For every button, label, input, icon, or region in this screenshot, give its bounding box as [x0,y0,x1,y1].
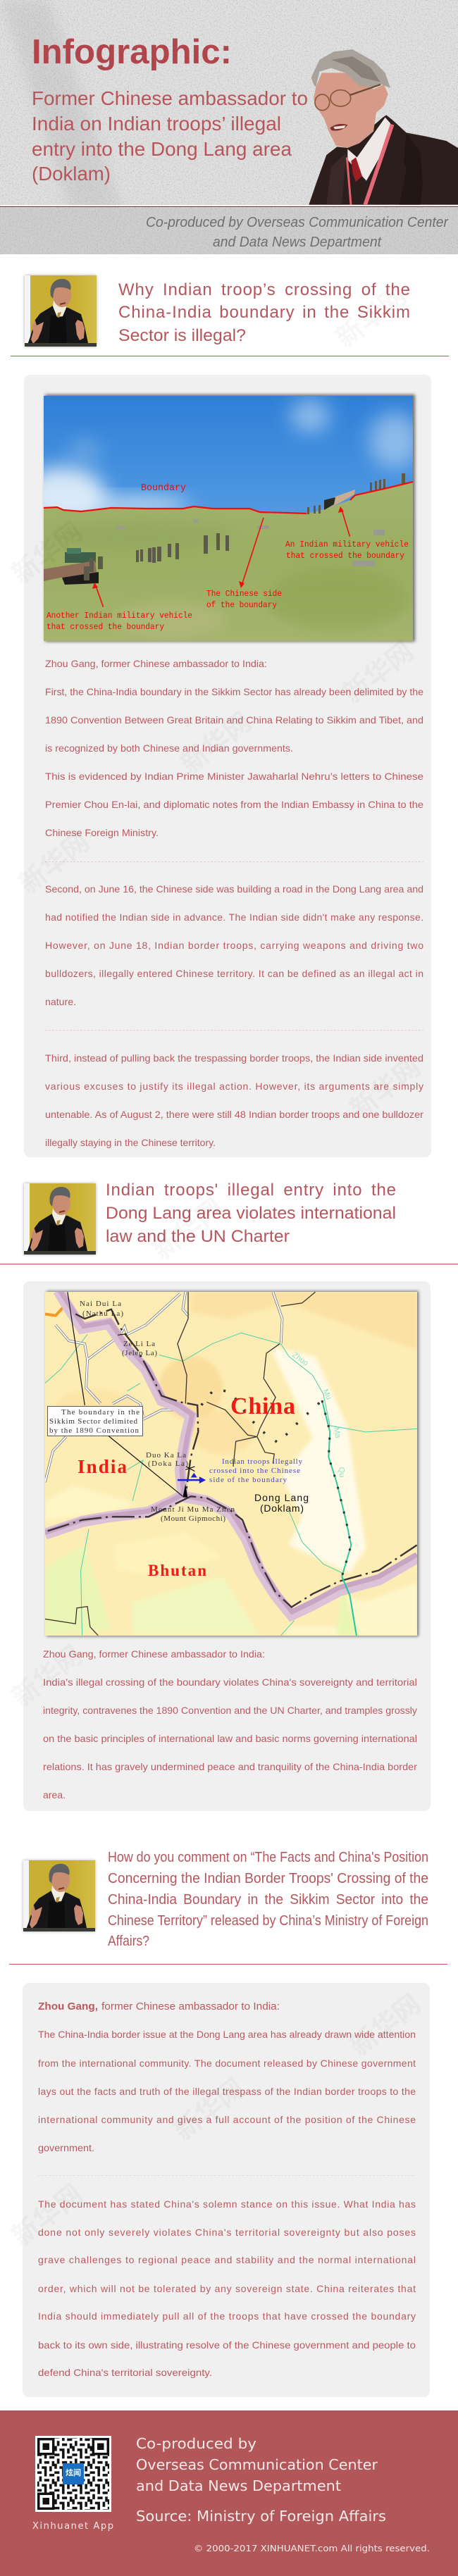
panel 1 text: Zhou Gang, former Chinese ambassador to India: [45,658,267,669]
byline: and Data News Department [213,235,382,250]
map place labels [78,1300,346,1579]
map callout box: Sikkim Sector delimited [49,1417,138,1426]
panel 1 text: 1890 Convention Between Great Britain and China Relating to Sikkim and Tibet, and [45,714,423,726]
question text: China-India boundary in the Sikkim [118,303,410,322]
map place labels: Duo Ka La [146,1451,186,1460]
leader lines [68,1292,194,1496]
map place labels: Qu [337,1467,346,1478]
panel 2 text: area. [43,1789,66,1800]
panel 3 text [38,2001,416,2378]
panel 3 text: from the international community. The document released by Chinese government [38,2058,416,2069]
panel 1 text: illegally staying in the Chinese territory. [45,1137,216,1148]
subtitle: Former Chinese ambassador to [32,87,308,109]
panel 3 text: back to its own side, illustrating resolve of the Chinese government and people to [38,2339,416,2351]
question text: Concerning the Indian Border Troops' Crossing of the [108,1871,428,1886]
question text: Sector is illegal? [118,326,246,345]
map place labels: Zhuo [290,1351,310,1368]
map place labels: Bhutan [148,1562,206,1579]
panel 1 text: nature. [45,996,76,1007]
panel 3 text: grave challenges to regional peace and stability and the normal international [38,2254,416,2265]
panel 3 text: former Chinese ambassador to India: [101,2001,280,2012]
section 2 title text [106,1181,396,1246]
section 3 heading [23,1850,428,1949]
credits: and Data News Department [136,2477,341,2494]
map of the Dong Lang area [45,1290,419,1636]
panel 1 text: bulldozers, illegally entered Chinese territory. It can be defined as an illegal act in [45,968,423,979]
photo annotations: The Chinese side [206,589,282,599]
map callout box: The boundary in the [61,1408,140,1417]
panel 2 [23,1281,431,1811]
panel 2 text: Zhou Gang, former Chinese ambassador to India: [43,1648,265,1660]
title: Infographic: [32,33,232,71]
watermarks: 新华网 [169,2074,250,2146]
panel 2 text: integrity, contravenes the 1890 Convention and the UN Charter, and tramples grossly [43,1705,417,1716]
byline [146,215,449,250]
watermarks: 新华网 [14,827,95,900]
photo annotations: Boundary [141,483,186,494]
panel 3 text: defend China's territorial sovereignty. [38,2367,212,2378]
panel 2 text: on the basic principles of international law and basic norms governing international [43,1733,417,1744]
map place labels: (Jelep La) [122,1349,157,1357]
icon: portrait thumbnail [24,1183,96,1255]
question text: Why Indian troop’s crossing of the [118,280,410,299]
subtitle: entry into the Dong Lang area [32,138,292,160]
panel 1 text: Third, instead of pulling back the trespassing border troops, the Indian side invented [45,1052,423,1064]
map place labels: Mu [321,1388,333,1401]
map place labels: China [230,1393,295,1419]
copyright: © 2000-2017 XINHUANET.com All rights reserved. [194,2544,430,2553]
panel 1 text: had notified the Indian side in advance. The Indian side didn't make any response. [45,911,423,923]
section 1 heading [25,275,410,347]
question text: China-India Boundary in the Sikkim Sector into the [108,1892,428,1908]
header banner [0,0,458,254]
watermarks: 新华网 [148,1193,229,1266]
question text: Chinese Territory” released by China’s Ministry of Foreign [108,1913,428,1929]
vehicles and troops [44,473,405,585]
roads [45,1292,283,1482]
section 2 title text: Indian troops' illegal entry into the [106,1181,396,1200]
panel 1 text: However, on June 18, Indian border troops, carrying weapons and driving two [45,940,423,951]
map place labels: Ze Li La [123,1340,155,1348]
panel 3 text: international community and gives a full account of the position of the Chinese [38,2114,416,2125]
map callout box: by the 1890 Convention [49,1426,140,1435]
panel 1 text: First, the China-India boundary in the Sikkim Sector has already been delimited by the [45,686,423,697]
QR code: 炫闻 [66,2468,81,2477]
map place labels: Dong Lang [254,1492,309,1503]
icon: portrait thumbnail [25,275,97,347]
photo annotations [47,483,409,632]
panel 1 text: Chinese Foreign Ministry. [45,827,159,838]
panel 3 text: The document has stated China's solemn stance on this issue. What India has [38,2198,416,2210]
panel 1 text: Second, on June 16, the Chinese side was building a road in the Dong Lang area and [45,883,423,895]
arrows [92,506,349,607]
watermarks: 新华网 [7,517,88,590]
subtitle: India on Indian troops’ illegal [32,113,281,135]
watermarks: 新华网 [7,1641,88,1713]
subtitle: (Doklam) [32,163,111,185]
map place labels: (Nathu La) [82,1309,123,1318]
panel 1 text: Premier Chou En-lai, and diplomatic notes from the Indian Embassy in China to the [45,799,423,810]
map place labels: (Doklam) [260,1502,304,1514]
section 2 heading [24,1181,396,1255]
byline: Co-produced by Overseas Communication Center [146,215,449,230]
watermarks: 新华网 [345,1052,426,1125]
map place labels: Indian troops illegally [222,1457,303,1466]
subtitle [32,87,308,185]
map place labels: (Mount Gipmochi) [161,1514,225,1523]
photo annotations: that crossed the boundary [286,551,404,561]
map place labels: Ma [332,1426,342,1439]
panel 1 text: This is evidenced by Indian Prime Minister Jawaharlal Nehru’s letters to Chinese [45,771,423,782]
map place labels: crossed into the Chinese [209,1467,300,1475]
portrait of Zhou Gang [309,49,458,205]
panel 3 text: order, which will not be tolerated by any sovereign state. China reiterates that [38,2283,416,2294]
photo annotations: of the boundary [206,600,277,610]
panel 3 [23,1983,430,2397]
photo: Indian vehicles crossing the boundary [21,394,420,642]
panel 3 text: done not only severely violates China's territorial sovereignty but also poses [38,2227,416,2238]
map place labels: India [78,1456,127,1477]
watermarks: 新华网 [176,707,257,780]
panel 1 [21,375,431,1157]
panel 3 text: India should immediately pull all of the troops that have crossed the boundary [38,2310,416,2322]
panel 1 text: is recognized by both Chinese and Indian governments. [45,742,293,754]
boundary band [45,1290,417,1615]
photo annotations: that crossed the boundary [47,622,164,632]
question text: How do you comment on “The Facts and China's Position [108,1850,428,1865]
black rivers [45,1292,316,1636]
watermarks: 新华网 [338,637,419,709]
credits: Co-produced by [136,2435,256,2452]
panel 2 text: India's illegal crossing of the boundary violates China's sovereignty and territorial [43,1676,417,1688]
panel 1 text: untenable. As of August 2, there were still 48 Indian border troops and one bulldozer [45,1109,423,1120]
credits: Overseas Communication Center [136,2456,378,2473]
panel 3 text: The China-India border issue at the Dong Lang area has already drawn wide attention [38,2029,416,2040]
panel 3 text: lays out the facts and truth of the illegal trespass of the Indian border troops to the [38,2086,416,2097]
QR caption: Xinhuanet App [32,2521,113,2532]
panel 2 text: relations. It has gravely undermined peace and tranquility of the China-India border [43,1761,417,1772]
photo annotations: An Indian military vehicle [285,540,409,549]
terrain [45,1292,417,1636]
panel 3 text: government. [38,2142,94,2153]
panel 1 text: various excuses to justify its illegal action. However, its arguments are simply [45,1081,423,1092]
question text [108,1850,428,1949]
boundary line [44,506,307,514]
Chinese-claimed boundary (green dotted) [322,1400,351,1576]
rivers [45,1333,417,1636]
footer [0,2410,458,2576]
question text [118,280,410,345]
watermarks [7,281,426,2252]
map place labels: (Doka La) [148,1460,188,1468]
photo annotations: Another Indian military vehicle [47,611,192,621]
panel 2 text [43,1648,417,1800]
watermarks: 新华网 [345,1989,426,2062]
credits [136,2435,386,2525]
question text: Affairs? [108,1934,149,1949]
map callout box [48,1406,142,1436]
QR code [35,2436,111,2512]
section 2 title text: law and the UN Charter [106,1227,290,1246]
section 2 title text: Dong Lang area violates international [106,1204,396,1223]
watermarks: 新华网 [7,2179,88,2252]
map place labels: Nai Dui La [80,1300,121,1308]
panel 3 text: Zhou Gang, [38,2001,98,2012]
map place labels: Mount Ji Mu Ma Zhen [151,1505,235,1514]
watermarks: 新华网 [331,281,412,354]
icon: portrait thumbnail [23,1860,95,1931]
map place labels: side of the boundary [209,1476,287,1484]
panel 1 text [45,658,423,1148]
credits: Source: Ministry of Foreign Affairs [136,2508,386,2525]
